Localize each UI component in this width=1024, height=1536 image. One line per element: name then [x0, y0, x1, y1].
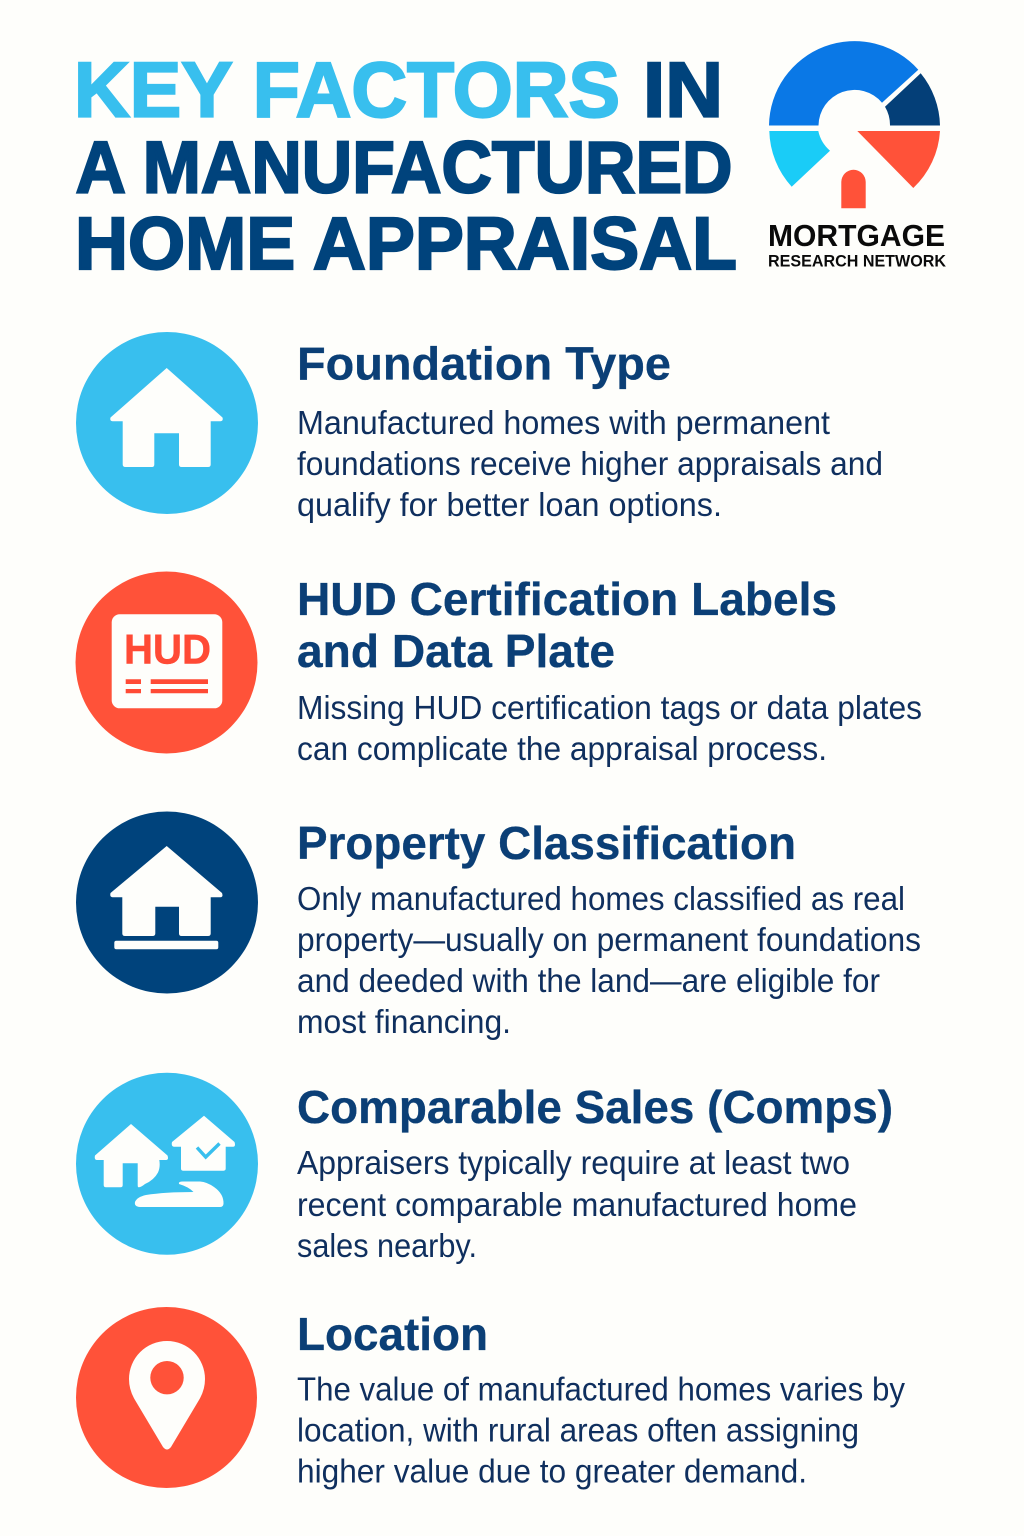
- icon: house on foundation: [76, 812, 258, 994]
- title: IN: [643, 46, 723, 134]
- title: HOME APPRAISAL: [75, 202, 737, 285]
- icon: map pin: [76, 1307, 257, 1488]
- description: Manufactured homes with permanent: [297, 404, 830, 441]
- panel: property classification: [76, 812, 921, 1040]
- description: Missing HUD certification tags or data plates: [297, 689, 922, 726]
- title: A MANUFACTURED: [76, 128, 732, 208]
- logo: Mortgage Research Network: [768, 41, 947, 271]
- heading: HUD Certification Labels: [297, 573, 837, 625]
- heading: Property Classification: [297, 817, 796, 869]
- description: sales nearby.: [297, 1227, 477, 1264]
- description: higher value due to greater demand.: [297, 1452, 807, 1490]
- heading: [297, 573, 837, 677]
- heading: Location: [297, 1308, 488, 1360]
- panel: location: [76, 1307, 905, 1490]
- description: foundations receive higher appraisals and: [297, 445, 883, 482]
- heading: Foundation Type: [297, 338, 671, 390]
- description: [297, 404, 883, 523]
- description: recent comparable manufactured home: [297, 1186, 857, 1223]
- panel: foundation type: [76, 332, 883, 523]
- description: and deeded with the land—are eligible for: [297, 962, 880, 999]
- description: [297, 1144, 857, 1264]
- logo mark: [769, 41, 940, 208]
- description: location, with rural areas often assigning: [297, 1412, 859, 1448]
- description: qualify for better loan options.: [297, 486, 722, 523]
- icon: HUD data plate: HUD: [124, 626, 211, 672]
- description: can complicate the appraisal process.: [297, 730, 827, 767]
- description: The value of manufactured homes varies by: [297, 1370, 905, 1408]
- logo wordmark: MORTGAGE: [768, 219, 945, 253]
- panel: comparable sales: [76, 1073, 893, 1264]
- heading: Comparable Sales (Comps): [297, 1081, 893, 1133]
- icon: house: [76, 332, 258, 514]
- icon: HUD data plate: [76, 572, 258, 754]
- heading: and Data Plate: [297, 625, 615, 677]
- logo wordmark: [768, 219, 947, 271]
- description: [297, 880, 921, 1040]
- description: Appraisers typically require at least two: [297, 1144, 850, 1181]
- description: property—usually on permanent foundations: [297, 921, 921, 958]
- description: most financing.: [297, 1003, 511, 1040]
- icon: two houses with checkmark: [76, 1073, 258, 1255]
- title: [74, 46, 737, 285]
- description: Only manufactured homes classified as real: [297, 880, 905, 917]
- description: [297, 1370, 905, 1490]
- logo wordmark: RESEARCH NETWORK: [768, 252, 947, 271]
- title: KEY FACTORS: [74, 46, 620, 134]
- panel: HUD certification: [76, 572, 922, 767]
- description: [297, 689, 922, 767]
